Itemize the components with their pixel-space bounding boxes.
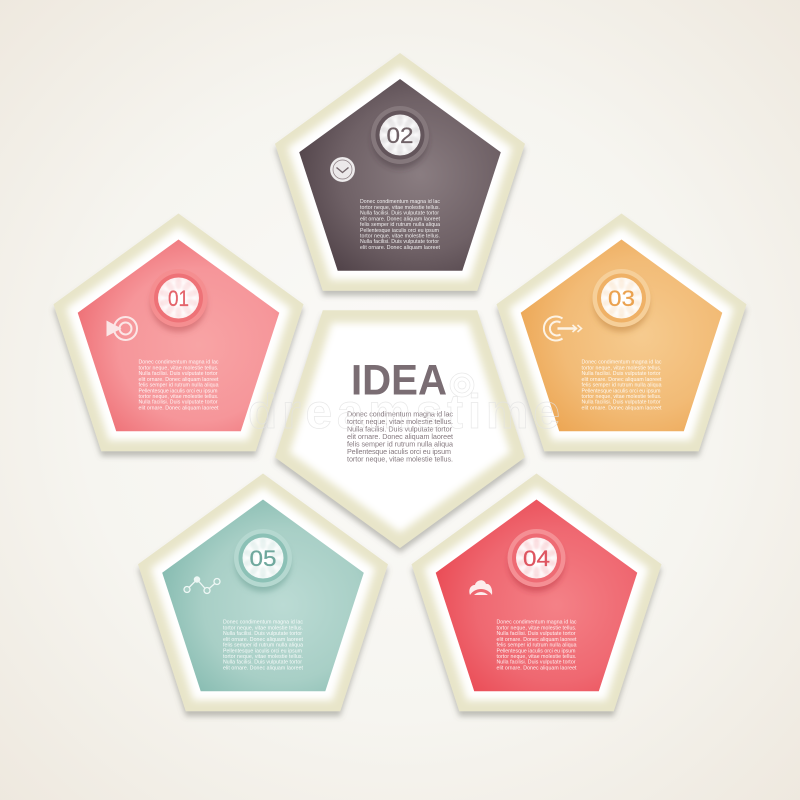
text block 05: tortor neque, vitae molestie tellus. (223, 625, 303, 631)
text block 03: Nulla facilisi. Duis vulputate tortor (582, 371, 661, 377)
icon: cloud (469, 580, 492, 595)
badge 01: 01 (168, 286, 189, 311)
text block 02: elit ornare. Donec aliquam laoreet (360, 216, 441, 222)
colored pentagon 03 (521, 240, 722, 431)
center text block: elit ornare. Donec aliquam laoreet (347, 432, 453, 441)
badge 05 (234, 529, 292, 592)
colored pentagon 01 (78, 240, 279, 431)
badge 04 (508, 529, 566, 592)
text block 01: Nulla facilisi. Duis vulputate tortor (138, 371, 218, 377)
text block 05: Donec condimentum magna id lac (223, 620, 303, 626)
badge 05: 05 (250, 546, 276, 571)
text block 04: felis semper id rutrum nulla aliqua (496, 642, 577, 648)
text block 03: Nulla facilisi. Duis vulputate tortor (582, 400, 661, 406)
center text block: tortor neque, vitae molestie tellus. (347, 417, 453, 426)
text block 05: Pellentesque iaculis orci eu ipsum (223, 648, 302, 654)
text block 03: elit ornare. Donec aliquam laoreet (582, 406, 662, 412)
text block 02 (360, 199, 441, 251)
text block 04: tortor neque, vitae molestie tellus. (496, 625, 576, 631)
text block 03: tortor neque, vitae molestie tellus. (582, 365, 662, 371)
text block 05: Nulla facilisi. Duis vulputate tortor (223, 660, 302, 666)
text block 05: elit ornare. Donec aliquam laoreet (223, 666, 304, 672)
text block 01: tortor neque, vitae molestie tellus. (138, 394, 218, 400)
text block 02: Nulla facilisi. Duis vulputate tortor (360, 239, 439, 245)
text block 03: felis semper id rutrum nulla aliqua (582, 382, 662, 388)
colored pentagon 04 (436, 500, 637, 691)
colored pentagon 05 (162, 500, 364, 691)
frame 01 (54, 214, 304, 451)
text block 01: Donec condimentum magna id lac (138, 360, 219, 366)
text block 04 (496, 620, 577, 672)
watermark: dreamstime (248, 386, 560, 439)
text block 01: tortor neque, vitae molestie tellus. (138, 365, 218, 371)
badge 03 (592, 269, 650, 332)
text block 03: Pellentesque iaculis orci eu ipsum (582, 388, 660, 394)
panel: 05 line graph (138, 474, 388, 711)
icon: dart in target (544, 316, 582, 340)
text block 01: elit ornare. Donec aliquam laoreet (138, 406, 219, 412)
frame 05 (138, 474, 388, 711)
frame 03 (496, 214, 746, 451)
text block 01 (138, 360, 219, 412)
text block 02: tortor neque, vitae molestie tellus. (360, 205, 440, 211)
text block 05 (223, 620, 304, 672)
text block 05: felis semper id rutrum nulla aliqua (223, 642, 303, 648)
center text block (347, 410, 453, 464)
center text block: felis semper id rutrum nulla aliqua (347, 440, 453, 448)
text block 04: Donec condimentum magna id lac (496, 620, 577, 626)
text block 03: tortor neque, vitae molestie tellus. (582, 394, 662, 400)
icon: line graph (184, 577, 220, 594)
text block 01: elit ornare. Donec aliquam laoreet (138, 377, 219, 383)
text block 05: elit ornare. Donec aliquam laoreet (223, 637, 304, 643)
panel: 02 clock (275, 53, 525, 291)
text block 05: Nulla facilisi. Duis vulputate tortor (223, 631, 302, 637)
text block 05: tortor neque, vitae molestie tellus. (223, 654, 303, 660)
colored pentagon 02 (299, 79, 501, 271)
text block 02: Donec condimentum magna id lac (360, 199, 440, 205)
icon: clock (330, 158, 354, 182)
text block 03: elit ornare. Donec aliquam laoreet (582, 377, 662, 383)
badge 01 (150, 269, 208, 332)
icon: target with arrow (106, 317, 137, 340)
text block 04: elit ornare. Donec aliquam laoreet (496, 637, 577, 643)
frame 04 (412, 474, 662, 711)
text block 01: felis semper id rutrum nulla aliqua (138, 382, 219, 388)
text block 04: tortor neque, vitae molestie tellus. (496, 654, 576, 660)
text block 02: Pellentesque iaculis orci eu ipsum (360, 228, 439, 234)
frame 02 (275, 53, 525, 291)
text block 04: Pellentesque iaculis orci eu ipsum (496, 648, 576, 654)
badge 02: 02 (386, 123, 414, 148)
center text block: tortor neque, vitae molestie tellus. (347, 454, 453, 464)
text block 04: Nulla facilisi. Duis vulputate tortor (496, 631, 576, 637)
panel: center idea (275, 310, 525, 548)
text block 04: Nulla facilisi. Duis vulputate tortor (496, 660, 576, 666)
panel: 01 target (54, 214, 304, 451)
text block 01: Nulla facilisi. Duis vulputate tortor (138, 400, 218, 406)
center frame (275, 310, 525, 548)
heading: IDEA: IDEA (351, 356, 447, 404)
text block 01: Pellentesque iaculis orci eu ipsum (138, 388, 218, 394)
text block 02: felis semper id rutrum nulla aliqua (360, 222, 440, 228)
center text block: Pellentesque iaculis orci eu ipsum (347, 447, 451, 456)
text block 04: elit ornare. Donec aliquam laoreet (496, 666, 577, 672)
text block 03 (582, 360, 662, 412)
badge 02 (371, 106, 429, 169)
badge 03: 03 (608, 286, 635, 311)
text block 02: Nulla facilisi. Duis vulputate tortor (360, 211, 439, 217)
center text block: Donec condimentum magna id lac (347, 410, 453, 418)
badge 04: 04 (523, 546, 550, 571)
text block 02: elit ornare. Donec aliquam laoreet (360, 245, 441, 251)
panel: 04 cloud (412, 474, 662, 711)
panel: 03 dart (496, 214, 746, 451)
text block 02: tortor neque, vitae molestie tellus. (360, 234, 440, 240)
center text block: Nulla facilisi. Duis vulputate tortor (347, 424, 453, 434)
text block 03: Donec condimentum magna id lac (582, 360, 662, 366)
